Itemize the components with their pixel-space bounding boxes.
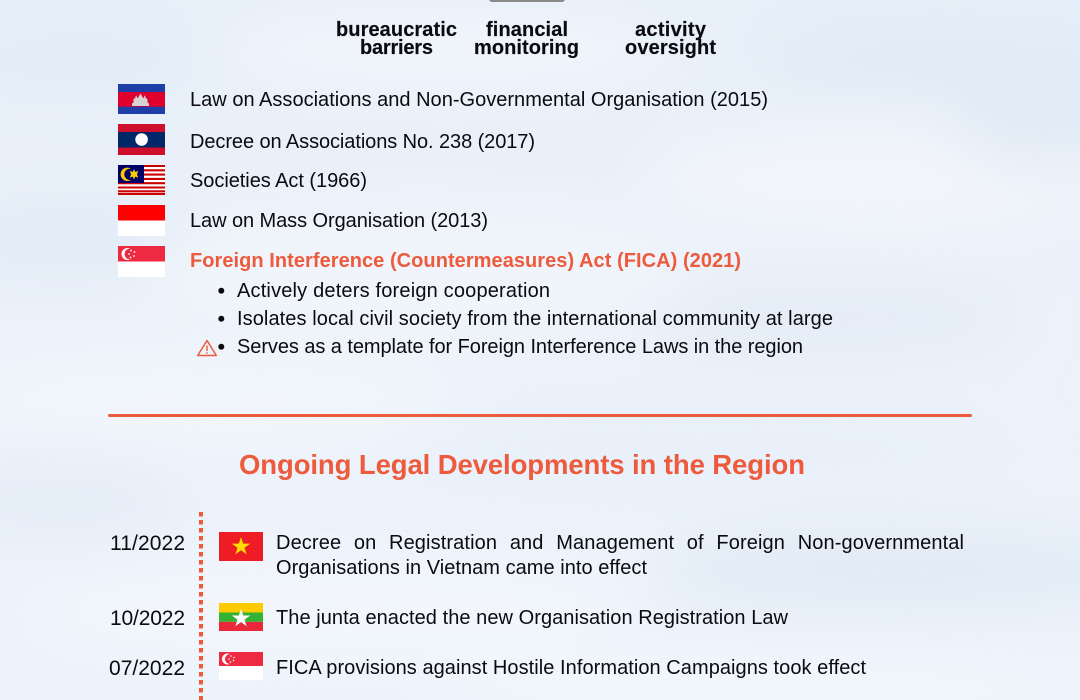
text: Indonesia law: Law on Mass Organisation (2013) [190,210,488,232]
icon: flag of Singapore [219,652,263,680]
icon: flag of Laos [118,124,165,155]
timeline: dotted line [199,512,203,700]
heading: financial monitoring [474,19,579,59]
text: Laos decree: Decree on Associations No. 238 (2017) [190,131,535,153]
icon: flag of Singapore [118,246,165,277]
heading: bureaucratic barriers: bureaucratic [336,19,457,41]
description: Decree on Registration and Management of Foreign Non-governmental [276,532,964,554]
description: FICA provisions against Hostile Information Campaigns took effect [276,657,866,679]
heading: financial monitoring: monitoring [474,37,579,59]
bullet: deters cooperation: Actively deters foreign cooperation [237,280,550,302]
heading: financial monitoring: financial [486,19,568,41]
grey tab at top edge [489,0,565,2]
timeline entry: 07/2022 Singapore [109,652,866,680]
icon: flag of Myanmar [219,603,263,631]
text: Singapore FICA heading: Foreign Interference (Countermeasures) Act (FICA) (2021) [190,250,741,272]
description [276,532,964,579]
column headings [336,19,716,59]
text: Cambodia law: Law on Associations and Non-Governmental Organisation (2015) [190,89,768,111]
heading: bureaucratic barriers: barriers [360,37,433,59]
description: The junta enacted the new Organisation Registration Law [276,607,789,629]
date: 07/2022 [109,657,185,680]
text: Malaysia act: Societies Act (1966) [190,170,367,192]
bullet list: FICA effects [218,280,833,358]
heading: activity oversight: activity [635,19,707,41]
timeline entry: 11/2022 Vietnam [110,532,964,579]
bullet: isolates civil society: Isolates local civil society from the international community at large [237,308,833,330]
icon: warning triangle [198,340,216,356]
date: 11/2022 [110,532,185,555]
icon: flag of Malaysia [118,165,165,195]
icon: flag of Indonesia [118,205,165,236]
timeline entry: 10/2022 Myanmar [110,603,789,631]
icon: flag of Cambodia [118,84,165,114]
heading: activity oversight: oversight [625,37,716,59]
heading: activity oversight [625,19,716,59]
description: Organisations in Vietnam came into effect [276,557,647,579]
section title: Ongoing Legal Developments in the Region [239,449,805,480]
bullet: serves as template: Serves as a template for Foreign Interference Laws in the region [237,336,803,358]
date: 10/2022 [110,607,185,630]
icon: flag of Vietnam [219,532,263,561]
heading: bureaucratic barriers [336,19,457,59]
